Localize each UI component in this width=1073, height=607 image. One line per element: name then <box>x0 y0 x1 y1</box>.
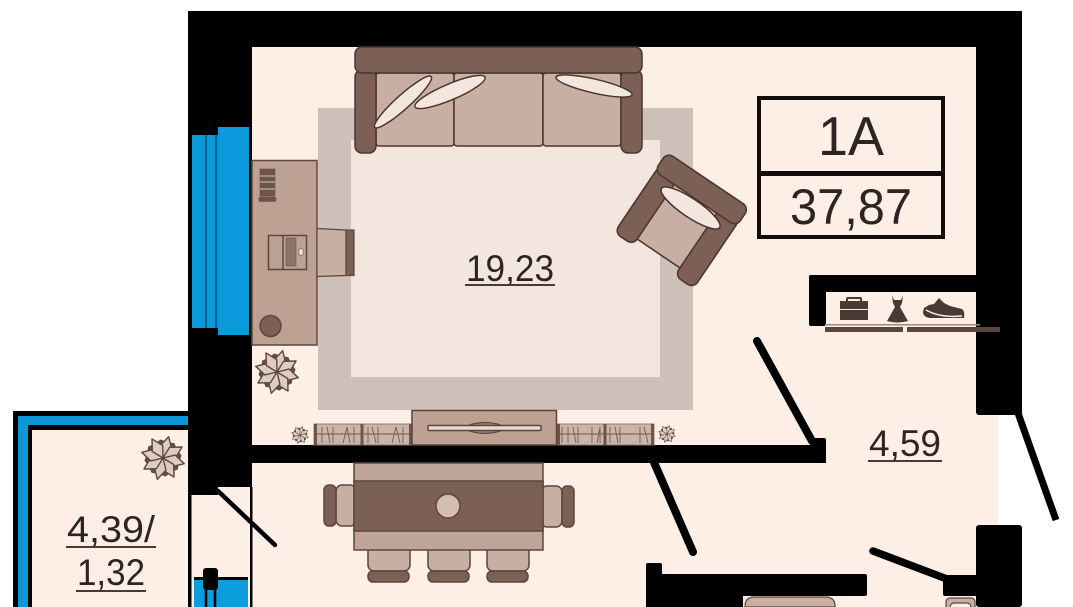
area: balcony: 4,39/ <box>67 509 156 550</box>
area: hallway: 4,59 <box>869 423 941 464</box>
area: balcony: 1,32 <box>77 552 145 593</box>
plant: small left <box>291 426 309 444</box>
plant: living room <box>254 349 300 395</box>
closet shelf <box>825 324 1000 332</box>
bathtub <box>745 597 835 607</box>
total area: 37,87 <box>790 179 912 235</box>
apartment floor <box>188 11 998 607</box>
TV stand <box>412 410 556 445</box>
apartment type: 1A <box>818 105 884 167</box>
walls <box>188 11 1022 607</box>
plant: small right <box>658 425 676 443</box>
icon: briefcase <box>840 297 868 320</box>
desk chair <box>317 228 354 276</box>
window: kitchen <box>194 568 248 607</box>
doors <box>218 341 1056 579</box>
sink <box>946 598 975 607</box>
balcony <box>13 411 189 607</box>
icon: shoe <box>923 298 964 318</box>
apartment label box <box>757 98 945 237</box>
area: living room: 19,23 <box>466 248 554 289</box>
dining table and chairs <box>324 463 574 582</box>
armchair <box>612 152 749 289</box>
icon: dress <box>887 295 908 322</box>
area: balcony <box>66 509 156 593</box>
curtains / low shelves <box>314 424 654 445</box>
window: living room <box>192 127 249 335</box>
sofa <box>355 47 642 153</box>
desk <box>252 160 317 345</box>
plant: balcony <box>140 435 186 481</box>
rug <box>318 108 693 410</box>
